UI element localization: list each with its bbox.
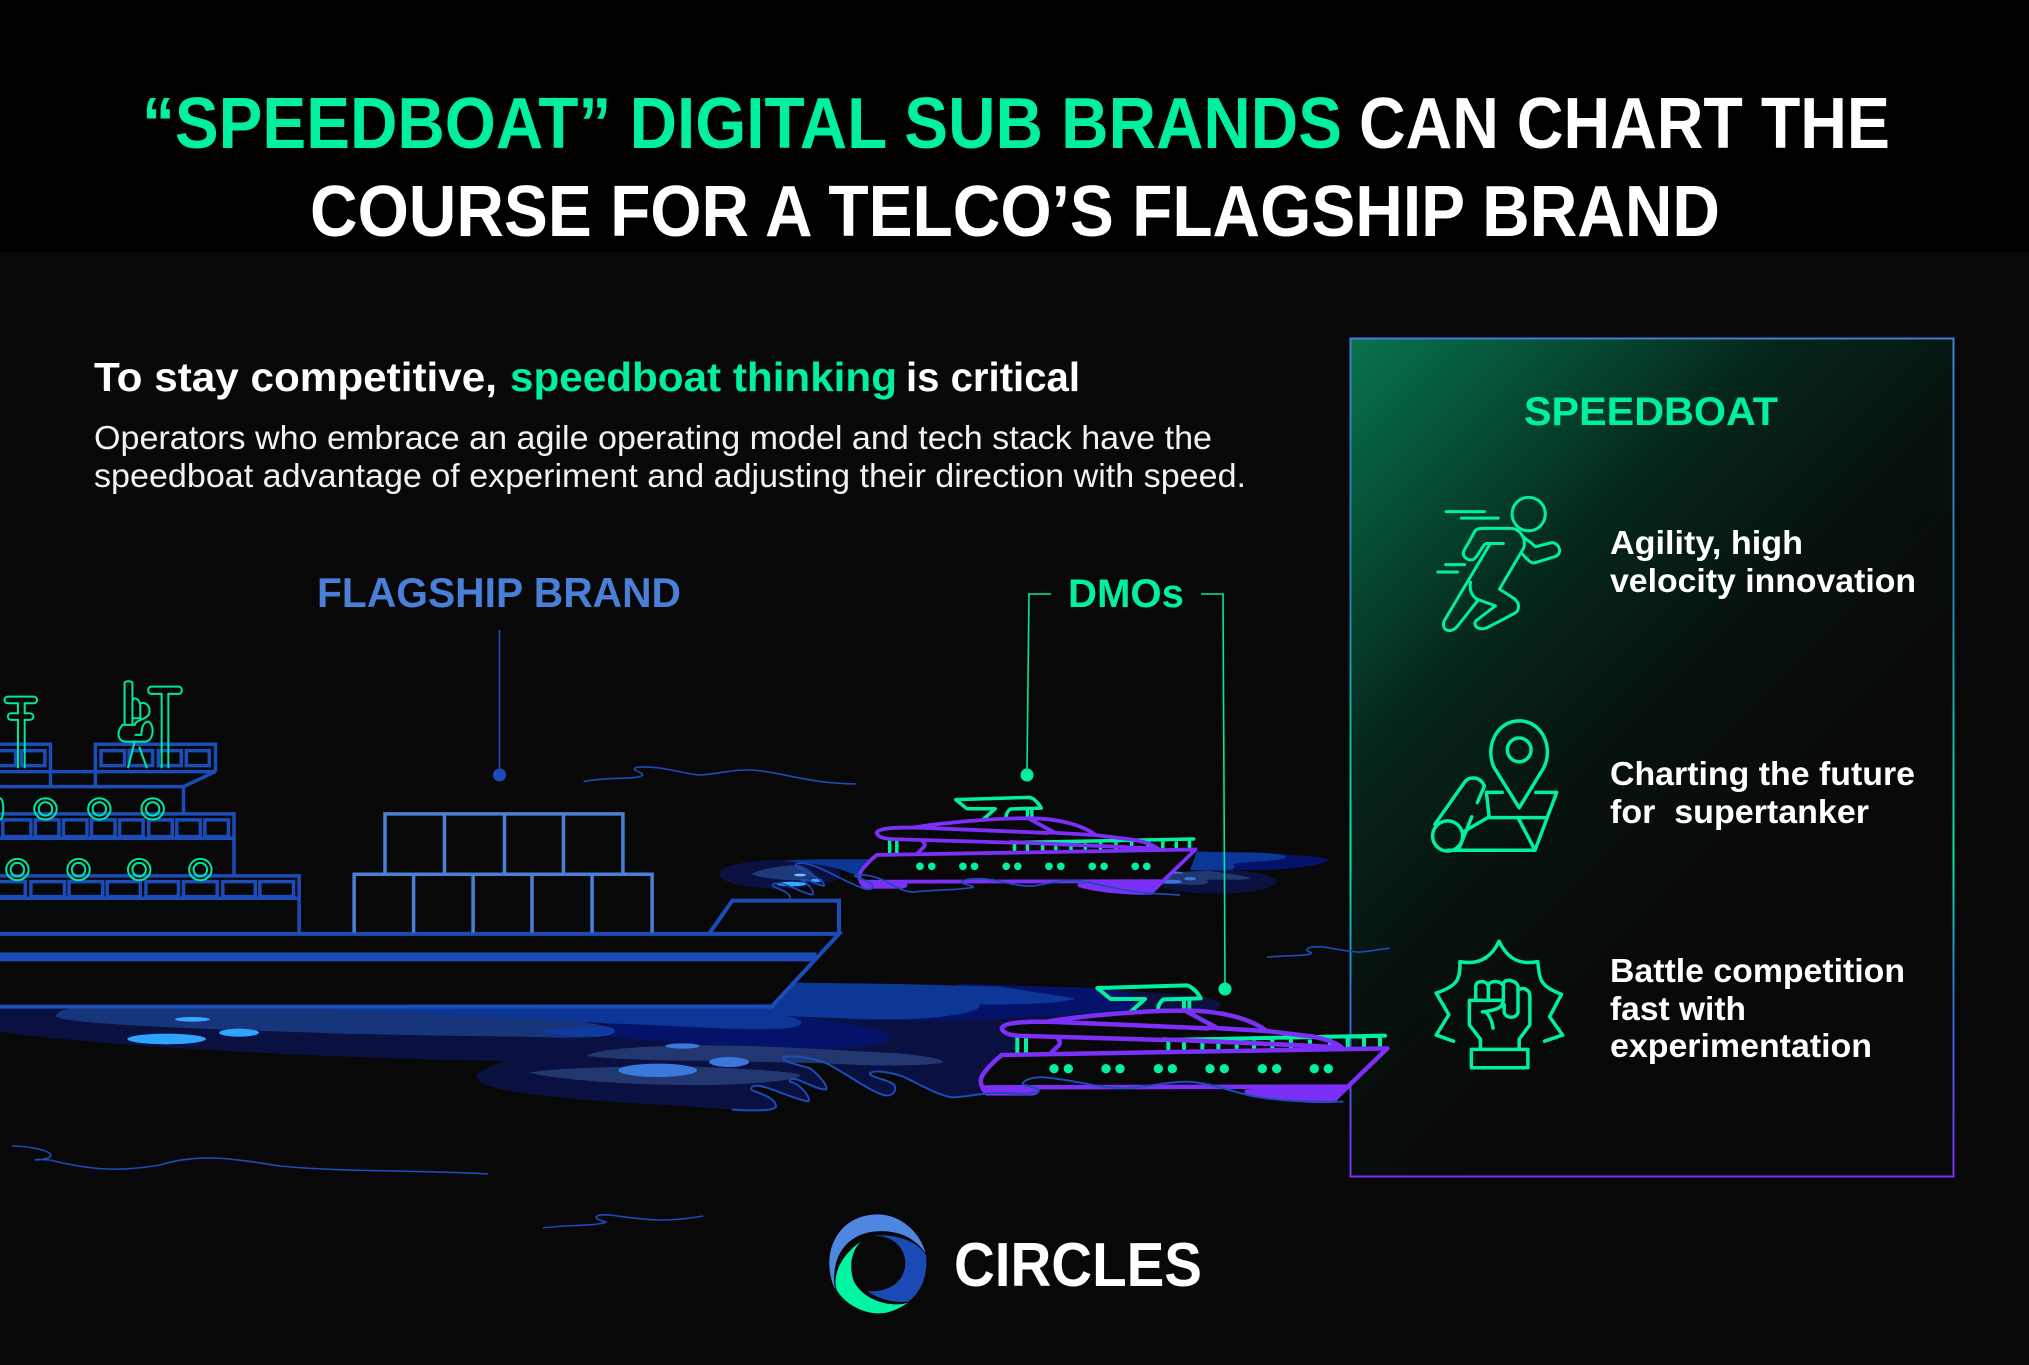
icon: fist	[1436, 941, 1563, 1068]
panel: speedboat	[1350, 338, 1954, 1176]
logo wordmark: CIRCLES	[954, 1231, 1202, 1300]
containers	[354, 814, 652, 933]
left leader	[1020, 594, 1051, 782]
text: battle: fast with	[1610, 990, 1746, 1027]
yacht windows	[1049, 1064, 1333, 1073]
text: charting	[1610, 755, 1915, 830]
subheading: is critical	[906, 354, 1080, 400]
title: “SPEEDBOAT” DIGITAL SUB BRANDS	[142, 84, 1342, 164]
title: CAN CHART THE	[1359, 84, 1890, 164]
yacht rails	[1017, 985, 1385, 1053]
text: charting: Charting the future	[1610, 755, 1915, 792]
yacht windows	[916, 862, 1151, 870]
text: battle: Battle competition	[1610, 952, 1905, 989]
portholes and antennas	[0, 681, 212, 880]
water under first yacht: left	[719, 859, 873, 889]
water under first yacht: right	[1157, 852, 1328, 894]
yacht: first	[859, 797, 1196, 893]
subheading: speedboat thinking	[510, 354, 897, 400]
text: agility: velocity innovation	[1610, 562, 1916, 599]
body text	[94, 419, 1246, 494]
label: DMOs: DMOs	[1068, 572, 1184, 616]
text: battle	[1610, 952, 1905, 1064]
thin waves	[12, 767, 1390, 1228]
body text: speedboat advantage of experiment and adjusting their direction with speed.	[94, 457, 1246, 494]
yacht rails	[890, 797, 1194, 854]
text: agility: Agility, high	[1610, 524, 1803, 561]
body text: Operators who embrace an agile operating model and tech stack have the	[94, 419, 1212, 456]
subheading: To stay competitive,	[94, 354, 497, 400]
wave: flagship and second yacht	[732, 1056, 1343, 1110]
water under flagship	[0, 983, 1221, 1110]
logo mark	[829, 1214, 926, 1313]
icon: map pin	[1433, 721, 1557, 851]
superstructure	[0, 744, 299, 934]
icon: runner	[1438, 497, 1560, 631]
panel heading: SPEEDBOAT	[1524, 390, 1778, 434]
yacht body	[859, 818, 1196, 893]
text: agility	[1610, 524, 1916, 599]
label: flagship brand	[317, 569, 681, 782]
yacht silhouette	[859, 818, 1196, 893]
yacht silhouette	[981, 1011, 1387, 1101]
yacht body	[981, 1011, 1387, 1101]
hull	[0, 901, 839, 1007]
title: COURSE FOR A TELCO’S FLAGSHIP BRAND	[310, 172, 1720, 252]
yacht: second	[981, 985, 1387, 1101]
right leader	[1201, 594, 1232, 996]
logo: circles	[829, 1214, 1202, 1313]
label: flagship brand: FLAGSHIP BRAND	[317, 569, 681, 616]
subheading	[94, 354, 1080, 400]
flagship ship	[0, 681, 839, 1007]
title band	[0, 0, 2029, 252]
label: DMOs	[1020, 572, 1232, 996]
text: battle: experimentation	[1610, 1027, 1872, 1064]
text: charting: for supertanker	[1610, 793, 1869, 830]
wave: first yacht	[773, 863, 1180, 898]
title	[142, 84, 1890, 252]
leader line	[493, 630, 506, 782]
